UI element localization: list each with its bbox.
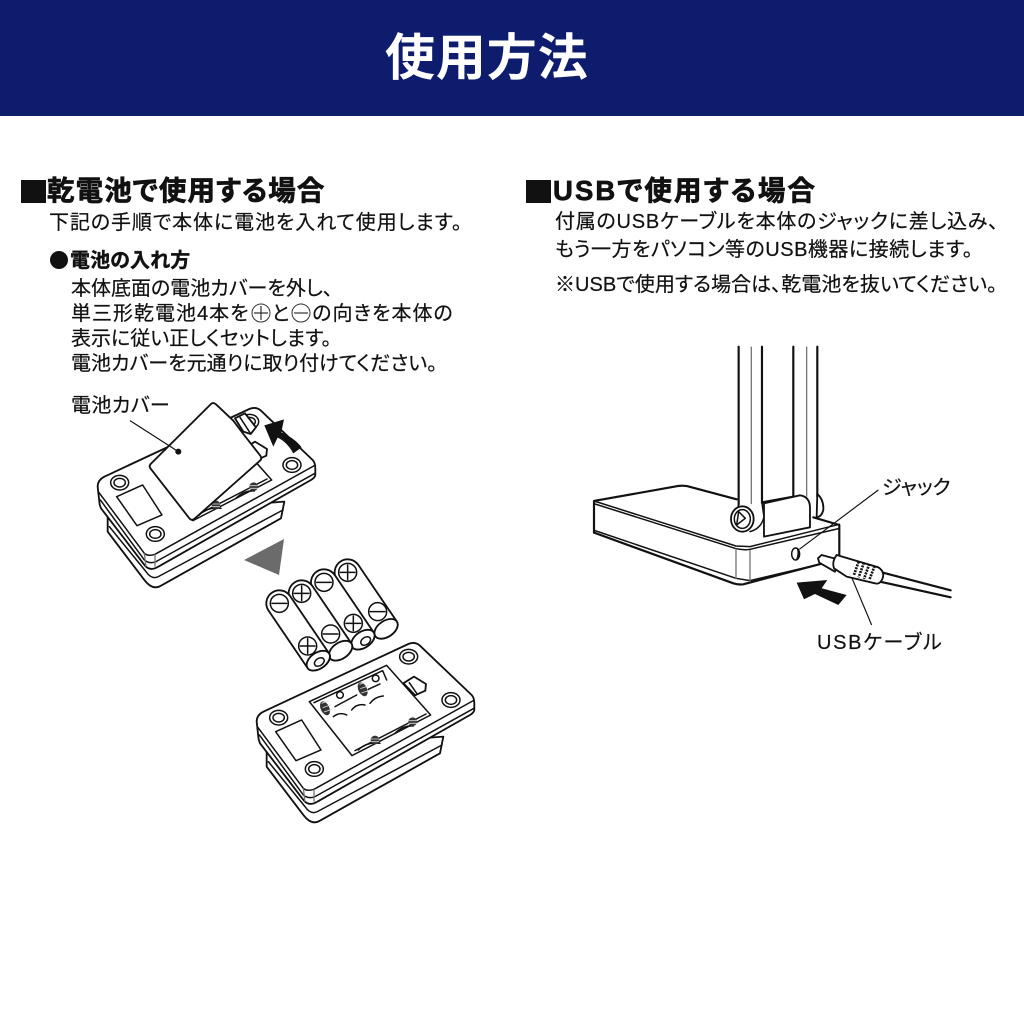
- heading: USB: USBで使用する場合: [553, 175, 817, 206]
- USB instruction text: もう一方をパソコン等のUSB機器に接続します。: [555, 239, 973, 261]
- battery 1: [261, 585, 334, 675]
- illustration: battery cover: [150, 403, 261, 520]
- instruction text: 表示に従い正しくセットします。: [71, 328, 331, 350]
- instruction text: 単三形乾電池4本を と の向きを本体の: [71, 303, 454, 325]
- lamp arms: [739, 347, 817, 510]
- leader line: USB cable: [852, 577, 872, 625]
- label: jack: ジャック: [882, 477, 951, 499]
- label: battery cover: 電池カバー: [71, 395, 170, 417]
- battery 4: [330, 554, 401, 643]
- illustration: device with battery cover: [98, 408, 315, 587]
- panel: USB instructions: [526, 175, 999, 296]
- instruction text: 本体底面の電池カバーを外し、: [71, 278, 333, 300]
- title: 使用方法: [385, 30, 589, 86]
- jack: [792, 548, 800, 560]
- leader line: battery cover: [130, 421, 181, 455]
- heading: dry battery: 乾電池で使用する場合: [47, 175, 326, 206]
- USB note: ※USBで使用する場合は、乾電池を抜いてください。: [555, 274, 997, 296]
- icon: down triangle: [244, 539, 284, 575]
- illustration: lamp base: [594, 347, 951, 597]
- battery 2: [284, 575, 356, 665]
- illustration: open device with battery compartment: [257, 643, 474, 822]
- plug and cable: [818, 555, 951, 597]
- panel: dry battery instructions: [21, 175, 463, 375]
- USB instruction text: [555, 210, 999, 261]
- hinge: [731, 494, 823, 537]
- instruction text: [71, 278, 454, 375]
- leader line: jack: [799, 490, 878, 549]
- subheading: how to insert batteries: 電池の入れ方: [70, 250, 190, 272]
- intro text: 下記の手順で本体に電池を入れて使用します。: [49, 212, 463, 234]
- icon: insert arrow: [797, 580, 847, 605]
- battery 3: [306, 564, 378, 654]
- instruction text: 電池カバーを元通りに取り付けてください。: [71, 353, 437, 375]
- illustration: batteries: [261, 554, 401, 675]
- icon: lift arrow: [264, 419, 302, 453]
- label: USB cable: USBケーブル: [817, 632, 943, 654]
- USB instruction text: 付属のUSBケーブルを本体のジャックに差し込み、: [555, 211, 999, 233]
- title banner: [0, 0, 1024, 116]
